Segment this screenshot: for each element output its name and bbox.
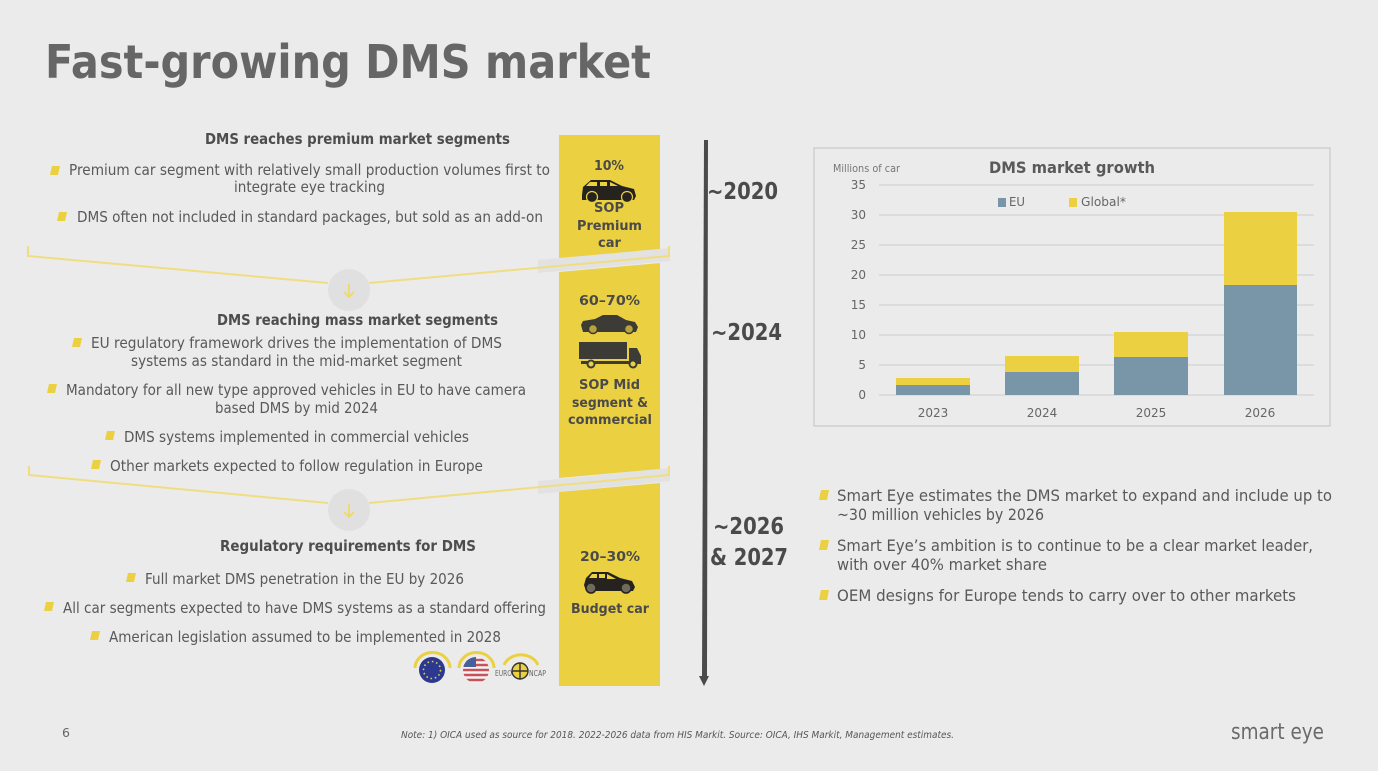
panel: mass market text: based DMS by mid 2024 [215,399,378,417]
panel: regulatory text: Regulatory requirements for DMS [220,537,476,555]
icon: SUV [582,180,636,202]
icon: US flag badge [459,653,494,683]
x axis labels: 2023 [918,406,948,420]
chevron divider 2 [29,466,670,531]
gridlines and y axis: 25 [851,238,866,252]
icon: sedan [581,315,638,334]
legend: EU [1009,195,1025,209]
column label: mid segment and commercial [568,293,652,428]
chevron divider 1 [28,246,670,311]
panel: key takeaways: ~30 million vehicles by 2026 [837,505,1044,524]
column label: premium car: 10% [594,158,624,174]
legend: Global* [1081,195,1126,209]
column label: budget car: 20–30% [580,549,640,565]
timeline label: 2026 and 2027: ~2026 [713,514,784,540]
panel: regulatory text: American legislation assumed to be implemented in 2028 [109,628,501,646]
panel: regulatory text [44,537,546,646]
panel: premium segment text: integrate eye tracking [234,178,385,196]
column label: mid segment and commercial: SOP Mid [579,377,640,393]
panel: premium segment text: Premium car segment with relatively small production volumes first to [69,161,550,179]
panel: regulatory text: All car segments expected to have DMS systems as a standard offering [63,599,546,617]
gridlines and y axis: 15 [851,298,866,312]
timeline label: 2026 and 2027 [710,514,788,571]
gridlines and y axis: 35 [851,178,866,192]
timeline label: 2026 and 2027: & 2027 [710,545,788,571]
panel: mass market text: EU regulatory framework drives the implementation of DMS [91,334,502,352]
icon: Euro NCAP badge [495,655,546,679]
panel: mass market text: DMS systems implemented in commercial vehicles [124,428,469,446]
panel: mass market text: Other markets expected to follow regulation in Europe [110,457,483,475]
logo: smart eye: smart eye [1231,720,1324,745]
panel: key takeaways [819,486,1332,605]
bars: 2023 [896,378,970,395]
column label: premium car [577,158,642,251]
icon: Euro NCAP badge: EURO [495,669,512,678]
panel: key takeaways: OEM designs for Europe tends to carry over to other markets [837,586,1296,605]
column label: premium car: SOP [594,200,624,216]
panel: premium segment text: DMS often not included in standard packages, but sold as an add-on [77,208,543,226]
source note: Note: 1) OICA used as source for 2018. 2022-2026 data from HIS Markit. Source: OICA, IHS Markit, Management estimates. [401,730,954,741]
x axis labels: 2025 [1136,406,1166,420]
column label: premium car: Premium [577,218,642,234]
panel: premium segment text [50,130,550,226]
icon: EU flag badge [415,653,450,683]
page number: 6 [62,725,70,740]
column label: budget car [571,549,649,617]
x axis labels [918,406,1275,420]
panel: mass market text: Mandatory for all new type approved vehicles in EU to have camera [66,381,526,399]
gridlines and y axis [851,178,1314,402]
timeline label: 2024: ~2024 [711,320,782,346]
panel: premium segment text: DMS reaches premium market segments [205,130,510,148]
column label: mid segment and commercial: 60–70% [579,293,640,309]
icon: truck [579,342,641,368]
panel: key takeaways: Smart Eye estimates the DMS market to expand and include up to [837,486,1332,505]
column label: mid segment and commercial: commercial [568,412,652,428]
panel: regulatory text: Full market DMS penetration in the EU by 2026 [145,570,464,588]
bars: 2026 [1224,212,1297,395]
icon: hatchback [584,572,635,593]
column label: mid segment and commercial: segment & [572,395,648,411]
gridlines and y axis: 20 [851,268,866,282]
panel: mass market text: DMS reaching mass market segments [217,311,498,329]
arrow: timeline [699,140,709,686]
panel: yellow adoption column [559,135,660,686]
panel: key takeaways: with over 40% market share [837,555,1047,574]
icon: Euro NCAP badge: NCAP [529,669,546,678]
gridlines and y axis: 30 [851,208,866,222]
title: Fast-growing DMS market [45,35,651,89]
bars: 2024 [1005,356,1079,395]
bars: 2025 [1114,332,1188,395]
chart: DMS market growth [814,148,1330,426]
axis unit label: Millions of car [833,163,901,175]
gridlines and y axis: 0 [858,388,866,402]
panel: mass market text [47,311,526,475]
column label: budget car: Budget car [571,601,649,617]
panel: key takeaways: Smart Eye’s ambition is to continue to be a clear market leader, [837,536,1313,555]
timeline label: 2020: ~2020 [707,179,778,205]
gridlines and y axis: 10 [851,328,866,342]
x axis labels: 2026 [1245,406,1275,420]
chart title: DMS market growth [989,158,1155,177]
x axis labels: 2024 [1027,406,1057,420]
gridlines and y axis: 5 [858,358,866,372]
column label: premium car: car [598,235,621,251]
legend [998,195,1126,209]
panel: mass market text: systems as standard in the mid-market segment [131,352,462,370]
